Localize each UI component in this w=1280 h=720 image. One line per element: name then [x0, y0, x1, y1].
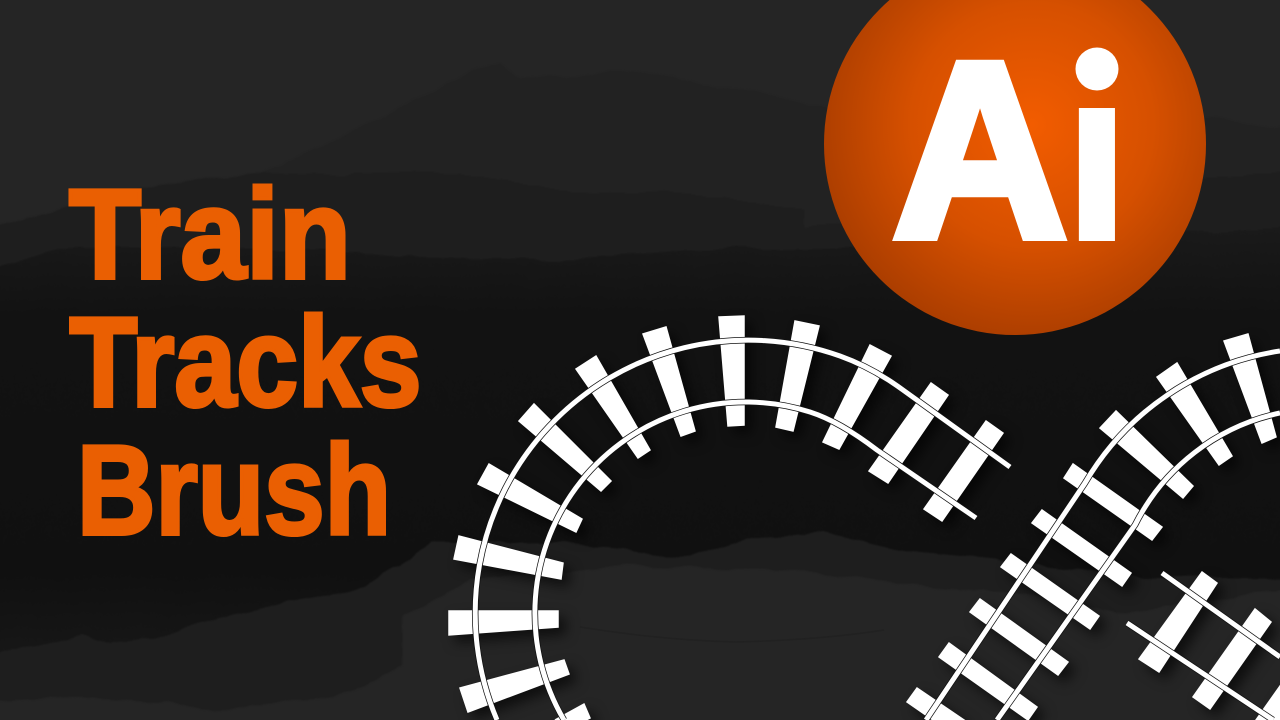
title line: Tracks: Tracks [70, 291, 422, 433]
rails [926, 351, 1280, 720]
title line: Brush: Brush [77, 419, 391, 561]
logo disc [824, 0, 1206, 335]
sleepers [1139, 572, 1280, 720]
logo text: A: A [893, 11, 1067, 289]
rails [1127, 573, 1280, 720]
rails [475, 340, 1010, 720]
sleepers [907, 334, 1276, 720]
railway track: S curve at right [907, 334, 1280, 720]
sleepers [449, 316, 1003, 720]
title: Train Tracks Brush [69, 163, 422, 561]
title line: Train: Train [69, 163, 351, 305]
railway track: large curve [449, 316, 1010, 720]
logo letter i stem: i [1060, 3, 1134, 297]
icon: Adobe Illustrator logo [824, 0, 1206, 335]
railway track: straight fragment at bottom right [1127, 572, 1280, 720]
logo i dot [1076, 48, 1118, 90]
